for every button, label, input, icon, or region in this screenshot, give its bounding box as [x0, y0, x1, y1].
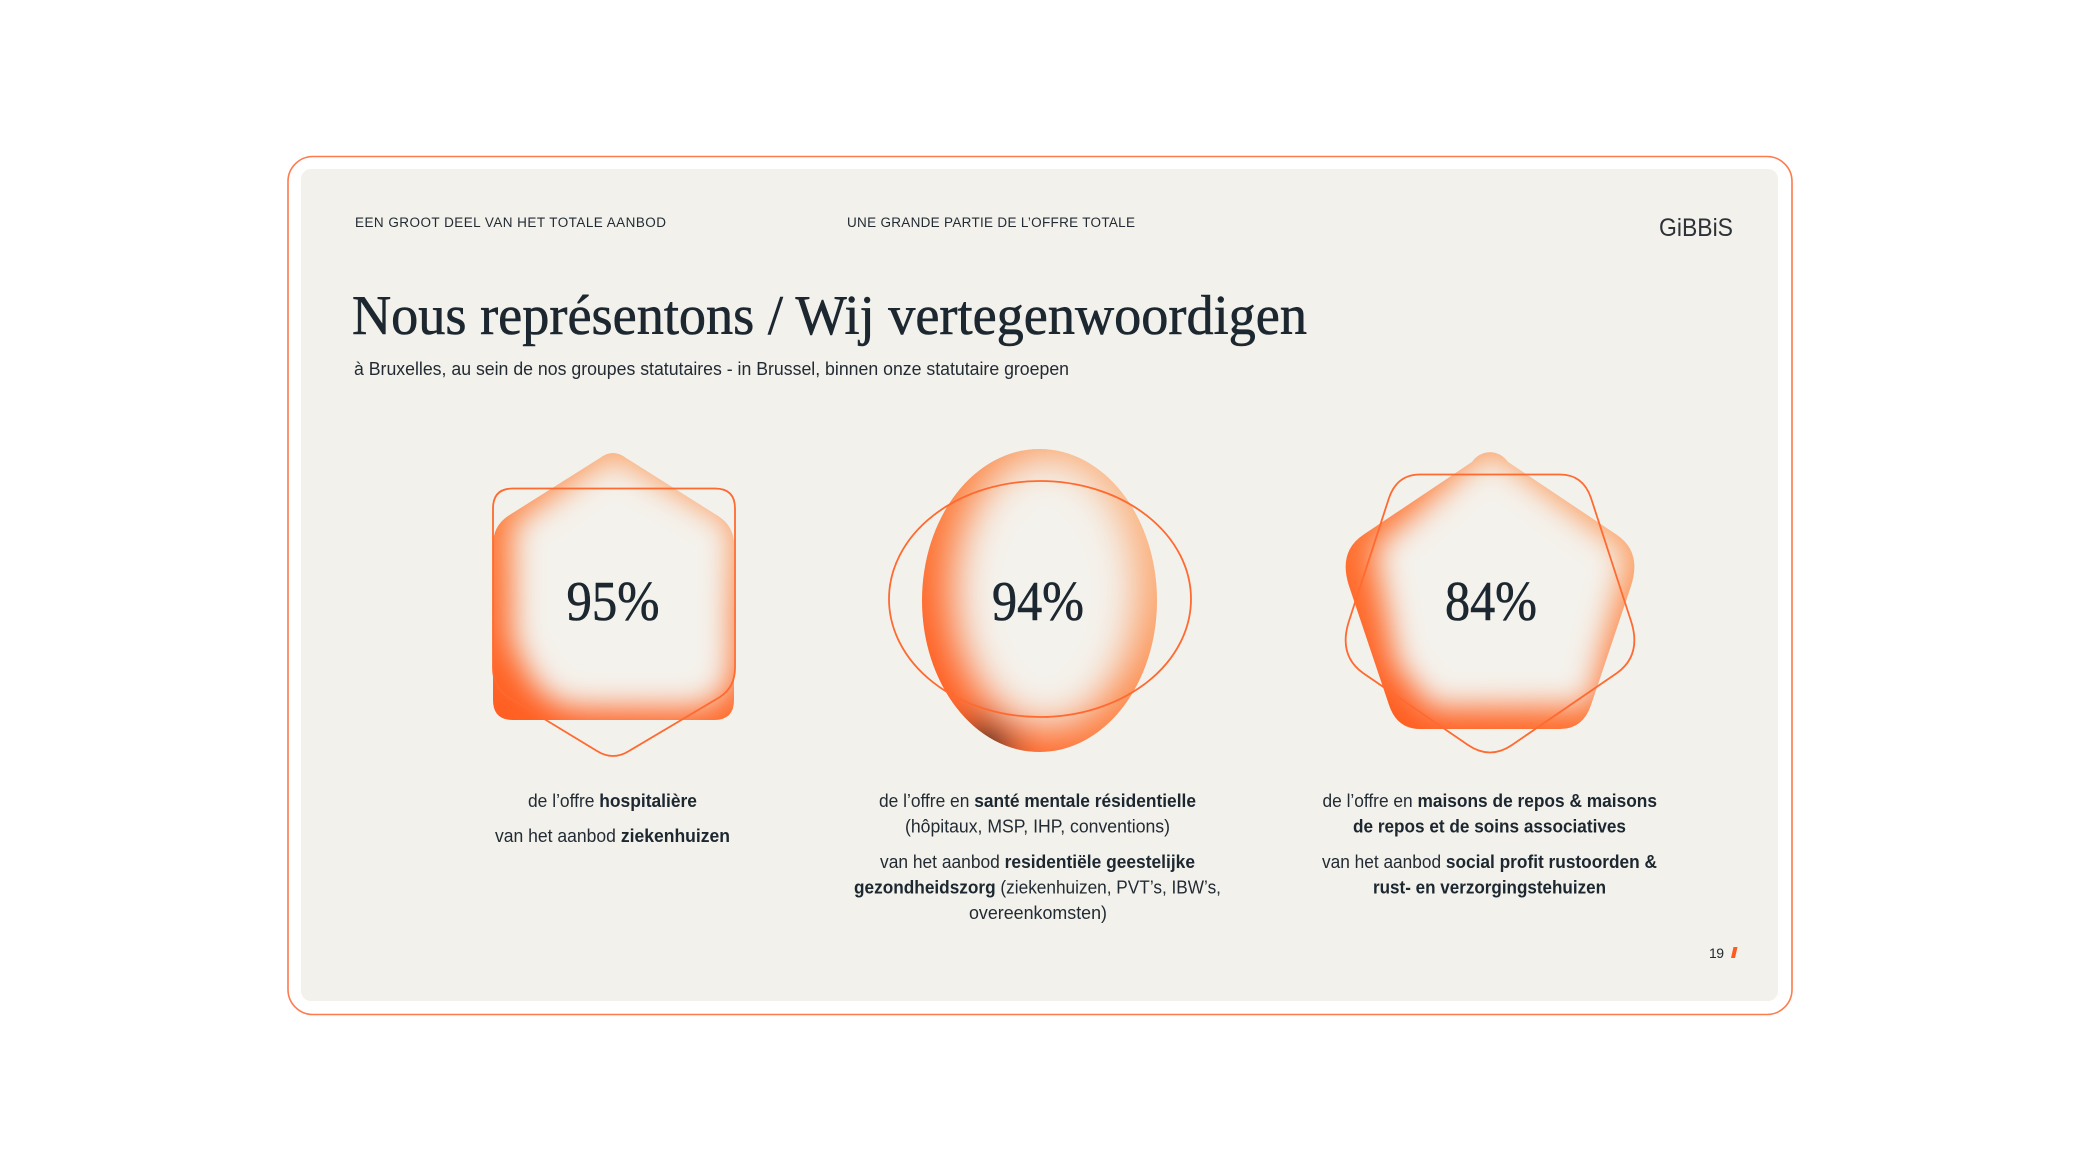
- caption: nursing homes: [1322, 791, 1657, 898]
- caption: nursing homes: van het aanbod social profit rustoorden &: [1322, 852, 1657, 872]
- caption: nursing homes: de l’offre en maisons de repos & maisons: [1322, 791, 1657, 811]
- caption: hospital: [495, 791, 730, 846]
- stat: 84% nursing homes: [1335, 440, 1645, 752]
- outline ellipse: [889, 481, 1191, 717]
- value: 95%: [566, 571, 660, 633]
- caption: mental health: de l’offre en santé mentale résidentielle: [879, 791, 1196, 811]
- outline inverted house: [493, 488, 735, 756]
- caption: mental health: [854, 791, 1221, 923]
- page number: 19: [1709, 945, 1724, 961]
- logo: GiBBiS: [1659, 214, 1733, 242]
- caption: mental health: overeenkomsten): [969, 903, 1107, 923]
- header tag: Dutch: EEN GROOT DEEL VAN HET TOTALE AANBOD: [355, 215, 666, 230]
- value: 94%: [992, 571, 1084, 633]
- value: 84%: [1445, 571, 1537, 633]
- caption: hospital: de l’offre hospitalière: [528, 791, 697, 811]
- subtitle: à Bruxelles, au sein de nos groupes statutaires - in Brussel, binnen onze statutaire groepen: [354, 359, 1069, 379]
- outline inverted pentagon: [1346, 474, 1634, 752]
- stat: 94% mental health: [889, 440, 1191, 760]
- header tag: French: UNE GRANDE PARTIE DE L’OFFRE TOTALE: [847, 215, 1135, 230]
- title: Nous représentons / Wij vertegenwoordigen: [352, 285, 1307, 347]
- caption: mental health: gezondheidszorg (ziekenhuizen, PVT’s, IBW’s,: [854, 878, 1221, 898]
- panel: slide background: [301, 169, 1778, 1001]
- caption: mental health: van het aanbod residentiële geestelijke: [880, 852, 1195, 872]
- caption: mental health: (hôpitaux, MSP, IHP, conventions): [905, 816, 1170, 836]
- caption: hospital: van het aanbod ziekenhuizen: [495, 826, 730, 846]
- stat: 95% hospital: [485, 440, 745, 756]
- gradient pentagon shape: [1346, 452, 1634, 729]
- gradient egg shape: [922, 449, 1157, 752]
- outer orange frame: [288, 156, 1792, 1014]
- slide: [287, 156, 1793, 1016]
- gradient house shape: [493, 453, 734, 720]
- caption: nursing homes: de repos et de soins associatives: [1353, 816, 1626, 836]
- icon: orange slash: [1731, 947, 1738, 958]
- caption: nursing homes: rust- en verzorgingstehuizen: [1373, 878, 1606, 898]
